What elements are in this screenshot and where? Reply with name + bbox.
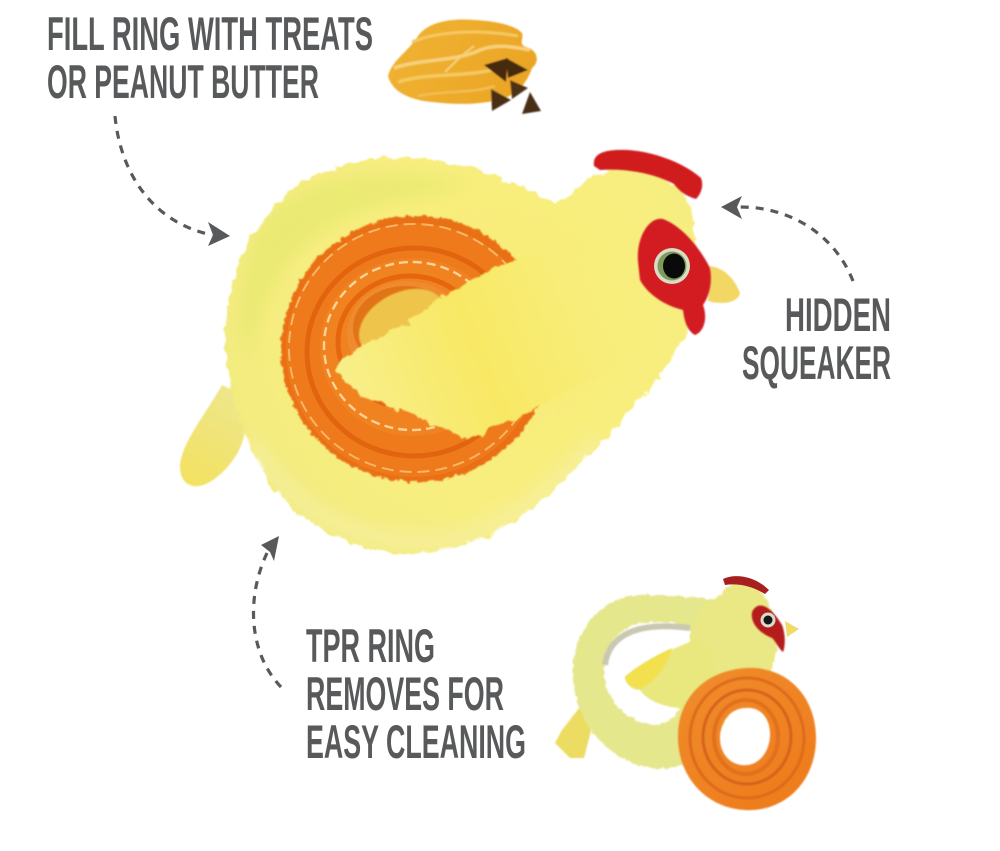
tail (180, 385, 245, 486)
label: hidden squeaker: HIDDEN (785, 288, 891, 341)
inner shade (605, 626, 690, 665)
ring hole showing yellow (347, 275, 457, 371)
small ring body (573, 595, 770, 769)
label: TPR ring removes for easy cleaning: REMOVES FOR (306, 667, 504, 720)
small beak (785, 621, 799, 637)
comb (594, 150, 702, 199)
wing (338, 252, 644, 440)
label: TPR ring removes for easy cleaning: EASY CLEANING (306, 715, 526, 768)
small head and neck (682, 583, 777, 706)
small eye (760, 612, 776, 628)
small eye patch (752, 606, 785, 652)
fluffy body with head (226, 158, 697, 553)
small chicken with ring removed (555, 576, 816, 810)
orange ring (678, 668, 816, 810)
small wing (625, 640, 716, 708)
arrow: to removable ring (253, 536, 281, 687)
icon: peanut butter with treats (388, 20, 541, 114)
TPR ring (281, 216, 551, 482)
small comb (723, 576, 769, 594)
fur tints clipped to body (242, 174, 600, 542)
small tail (555, 703, 592, 758)
label: hidden squeaker (742, 288, 891, 389)
main chicken toy (180, 150, 740, 553)
red eye patch and wattle (638, 219, 711, 335)
arrow: to hidden squeaker (721, 196, 853, 281)
heading: fill ring with treats or peanut butter: FILL RING WITH TREATS (47, 7, 373, 60)
label: TPR ring removes for easy cleaning: TPR RING (306, 619, 435, 672)
eye (654, 248, 690, 284)
label: TPR ring removes for easy cleaning (306, 619, 526, 768)
arrow: from treats label to ring (115, 116, 230, 246)
heading: fill ring with treats or peanut butter (47, 7, 373, 108)
beak (708, 266, 740, 303)
heading: fill ring with treats or peanut butter: OR PEANUT BUTTER (47, 55, 319, 108)
